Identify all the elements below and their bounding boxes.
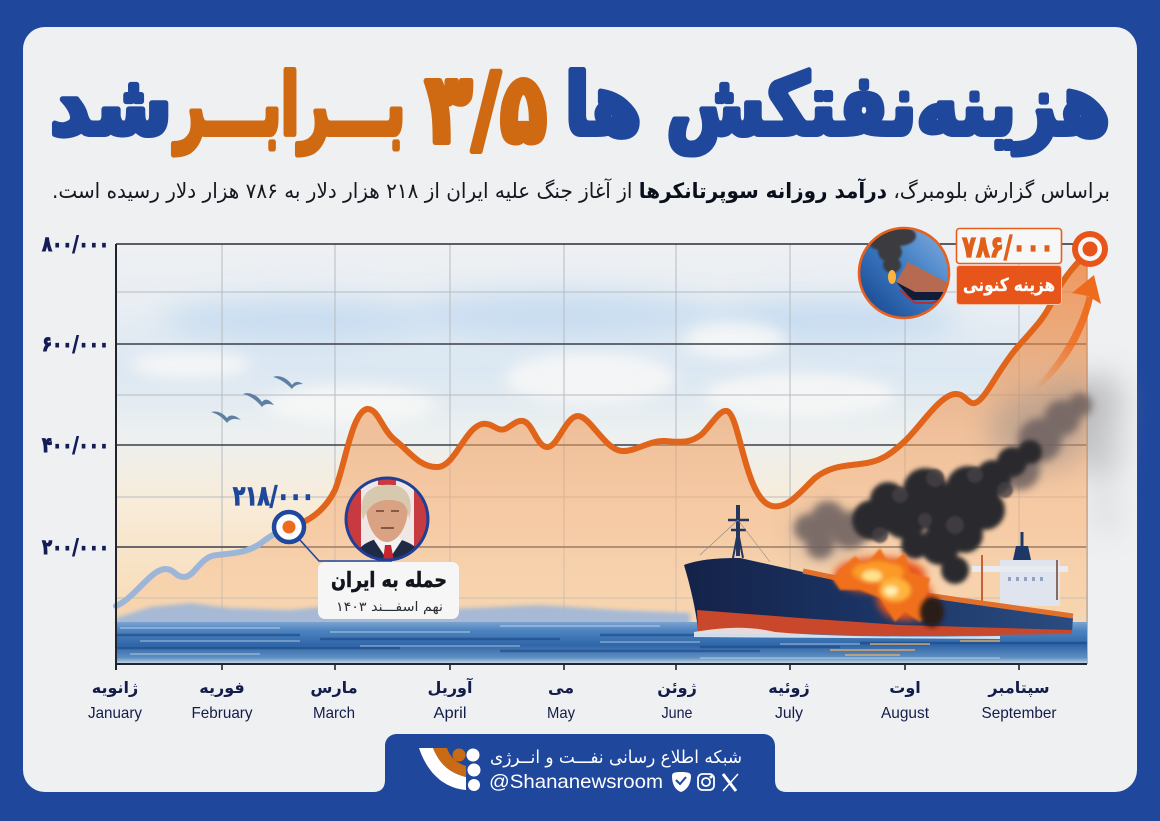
portrait: [345, 477, 429, 561]
area under curve: [116, 250, 1090, 625]
value box: ۷۸۶/۰۰۰: [962, 230, 1054, 265]
subtitle: براساس گزارش بلومبرگ، درآمد روزانه سوپرتانکرها از آغاز جنگ علیه ایران از ۲۱۸ هزار دلار به ۷۸۶ هزار دلار رسیده است.: [52, 178, 1110, 203]
y axis labels: ۴۰۰/۰۰۰: [42, 433, 109, 457]
icon: seagulls: [211, 376, 303, 423]
x axis labels: مارس: [310, 678, 358, 697]
line after the attack: [289, 250, 1090, 527]
agency name: شبکه اطلاع رسانی نفـــت و انــرژی: [490, 748, 742, 768]
deck: [803, 571, 1073, 616]
watercolor background: [117, 278, 1086, 622]
arrow: [1034, 275, 1101, 391]
aft superstructure: [972, 532, 1068, 606]
hull: [684, 558, 1073, 634]
y axis labels: ۶۰۰/۰۰۰: [42, 332, 109, 356]
y axis labels: [42, 232, 109, 559]
x axis labels: می: [548, 678, 574, 697]
footer tab: [373, 734, 787, 793]
current cost tag: [956, 266, 1062, 304]
x axis labels: [88, 677, 1057, 722]
tab shape: [373, 734, 787, 792]
x axis labels: March: [313, 705, 355, 722]
icon: instagram: [698, 774, 714, 790]
smoke drifting past the chart edge: [1072, 371, 1127, 538]
x axis labels: ژوئیه: [768, 678, 810, 697]
label: حمله به ایران: [331, 568, 447, 592]
x axis labels: February: [192, 705, 252, 722]
label: [318, 562, 459, 619]
sea: [116, 622, 1087, 664]
title: became: شد: [50, 56, 172, 154]
x axis labels: July: [775, 705, 803, 722]
grid lines: [116, 244, 1087, 664]
tanker photo: [858, 226, 950, 319]
red waterline: [697, 610, 1072, 636]
title: became: [50, 56, 405, 155]
title: became: بـــرابـــر: [173, 56, 405, 155]
line before the attack: [116, 527, 289, 606]
x axis labels: May: [547, 705, 575, 722]
chart: [42, 232, 1127, 722]
handle: @Shananewsroom: [489, 771, 663, 793]
title: [50, 53, 1110, 165]
label: نهم اسفـــند ۱۴۰۳: [336, 600, 443, 615]
current cost tag: هزینه کنونی: [963, 275, 1055, 296]
x axis labels: August: [881, 705, 930, 722]
value: 218,000: ۲۱۸/۰۰۰: [233, 481, 314, 512]
marker: start point: [274, 512, 304, 542]
icon: burning tanker: [684, 379, 1100, 639]
callout: current cost: [858, 226, 1108, 319]
x axis labels: ژوئن: [657, 678, 697, 697]
x axis labels: September: [982, 705, 1057, 722]
smoke plume: [794, 379, 1100, 584]
x axis labels: اوت: [889, 678, 921, 697]
callout: attack on Iran: [233, 477, 459, 619]
x axis labels: سپتامبر: [987, 678, 1050, 698]
marker: end point: [1072, 231, 1108, 267]
x axis labels: آوریل: [428, 677, 473, 697]
title: multiplier: ۳/۵: [425, 53, 547, 165]
y axis labels: ۲۰۰/۰۰۰: [42, 535, 109, 559]
y axis labels: ۸۰۰/۰۰۰: [42, 232, 109, 256]
distant mountains: [116, 603, 690, 626]
icon: shield badge: [672, 772, 691, 792]
bow wave: [694, 628, 1000, 639]
x axis labels: April: [434, 705, 466, 722]
icon: news agency logo: [419, 748, 480, 791]
axis: [116, 244, 1087, 670]
leader line: [300, 540, 392, 561]
forward mast: [700, 505, 770, 562]
x axis labels: June: [662, 705, 693, 722]
icon: X: [723, 774, 738, 791]
x axis labels: January: [88, 705, 142, 722]
x axis labels: فوریه: [199, 678, 245, 697]
x axis labels: ژانویه: [92, 678, 138, 697]
fire: [832, 548, 944, 627]
